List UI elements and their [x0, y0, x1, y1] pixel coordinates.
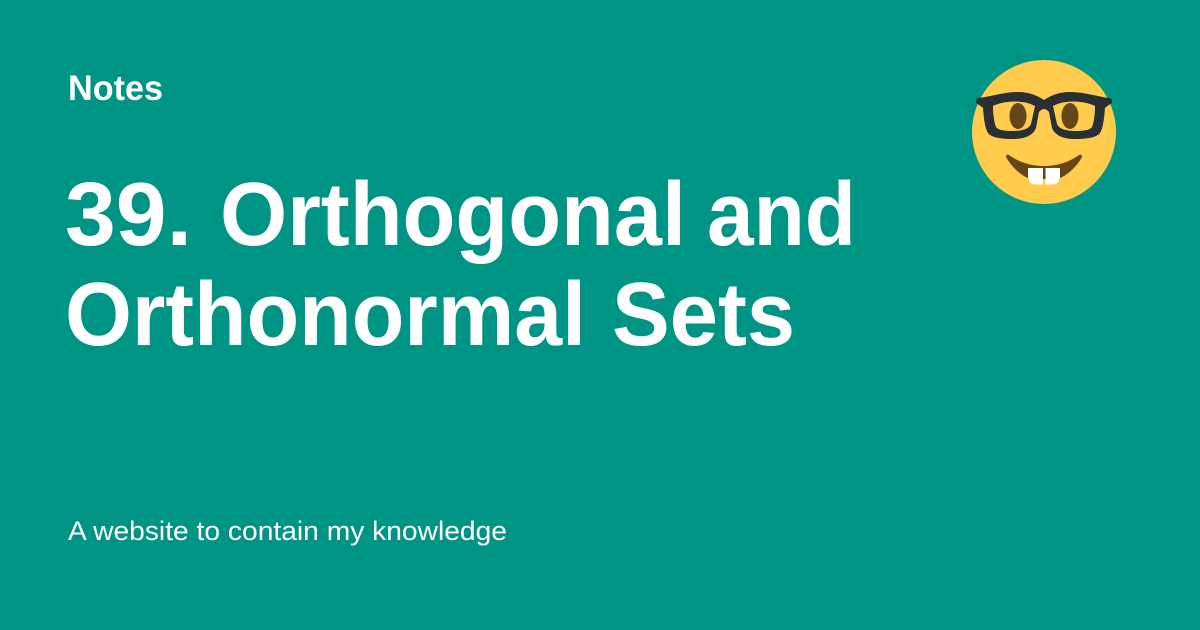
- title: [65, 165, 856, 365]
- site name: Notes: [68, 69, 163, 108]
- title: Sets: [612, 265, 795, 365]
- glasses: [976, 92, 1112, 139]
- title: Orthogonal: [220, 165, 686, 265]
- title: 39.: [65, 165, 192, 265]
- icon: nerd face emoji: [972, 60, 1116, 204]
- tagline: A website to contain my knowledge: [68, 516, 507, 546]
- teeth: [1028, 168, 1060, 184]
- title: and: [707, 165, 856, 265]
- mouth: [1006, 155, 1082, 179]
- eyes: [1010, 103, 1078, 129]
- title: Orthonormal: [65, 265, 586, 365]
